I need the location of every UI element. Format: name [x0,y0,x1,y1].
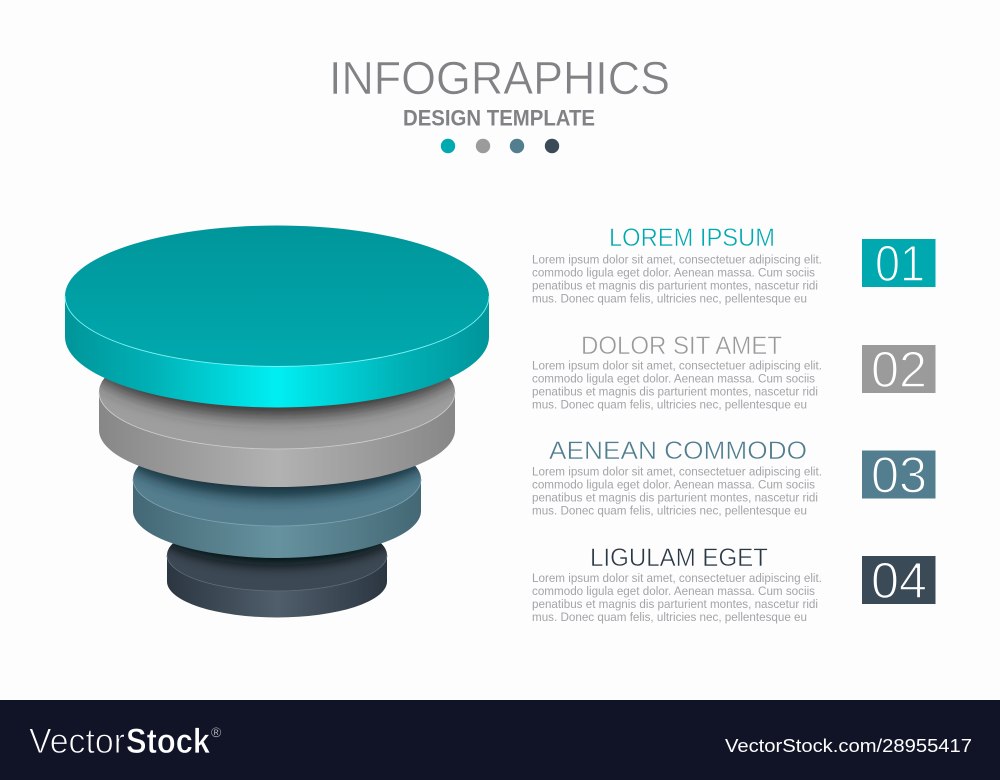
number box 02: 02 [871,341,927,398]
body text 03: mus. Donec quam felis, ultricies nec, pellentesque eu [532,504,807,518]
body text 04: commodo ligula eget dolor. Aenean massa. Cum sociis [532,584,815,598]
subtitle: DESIGN TEMPLATE [403,106,595,130]
number box 03: 03 [871,446,927,504]
body text 01: mus. Donec quam felis, ultricies nec, pellentesque eu [532,292,807,306]
body text 03: penatibus et magnis dis parturient montes, nascetur ridi [532,490,818,504]
footer logo: Stock [126,722,210,761]
body text 04: mus. Donec quam felis, ultricies nec, pellentesque eu [532,610,807,624]
body text 02: penatibus et magnis dis parturient montes, nascetur ridi [532,384,818,398]
body text 03: commodo ligula eget dolor. Aenean massa. Cum sociis [532,478,815,492]
layer 3: blue disc [132,466,422,558]
body text 02: commodo ligula eget dolor. Aenean massa. Cum sociis [532,372,815,386]
heading 01: LOREM IPSUM [609,224,775,252]
number box 01: 01 [875,235,925,292]
heading 03: AENEAN COMMODO [549,437,807,465]
title: INFOGRAPHICS [329,52,670,104]
heading 04: LIGULAM EGET [590,544,768,572]
item 04 [532,544,936,624]
body text 03: Lorem ipsum dolor sit amet, consectetuer adipiscing elit. [532,464,822,478]
colour dots [441,139,559,153]
body text 02: mus. Donec quam felis, ultricies nec, pellentesque eu [532,398,807,412]
footer image id: VectorStock.com/28955417 [725,736,972,756]
body text 03 [532,464,822,518]
footer logo [29,722,222,761]
body text 02: Lorem ipsum dolor sit amet, consectetuer adipiscing elit. [532,358,822,372]
body text 02 [532,358,822,412]
item 01 [532,224,936,306]
footer logo: ® [211,724,222,740]
body text 01 [532,252,822,306]
body text 04: penatibus et magnis dis parturient montes, nascetur ridi [532,597,818,611]
layer 4: dark disc [166,543,388,618]
body text 01: Lorem ipsum dolor sit amet, consectetuer adipiscing elit. [532,252,822,266]
stacked cylinder chart [65,226,489,618]
body text 01: penatibus et magnis dis parturient montes, nascetur ridi [532,278,818,292]
layer 2: grey disc [98,378,456,487]
footer bar [0,700,1000,780]
item 02 [532,332,936,412]
item 03 [532,437,936,518]
layer 1: teal disc [65,226,489,408]
body text 04 [532,571,822,624]
body text 04: Lorem ipsum dolor sit amet, consectetuer adipiscing elit. [532,571,822,585]
number box 04: 04 [871,552,927,609]
heading 02: DOLOR SIT AMET [581,332,782,360]
footer logo: Vector [29,722,125,761]
body text 01: commodo ligula eget dolor. Aenean massa. Cum sociis [532,266,815,280]
